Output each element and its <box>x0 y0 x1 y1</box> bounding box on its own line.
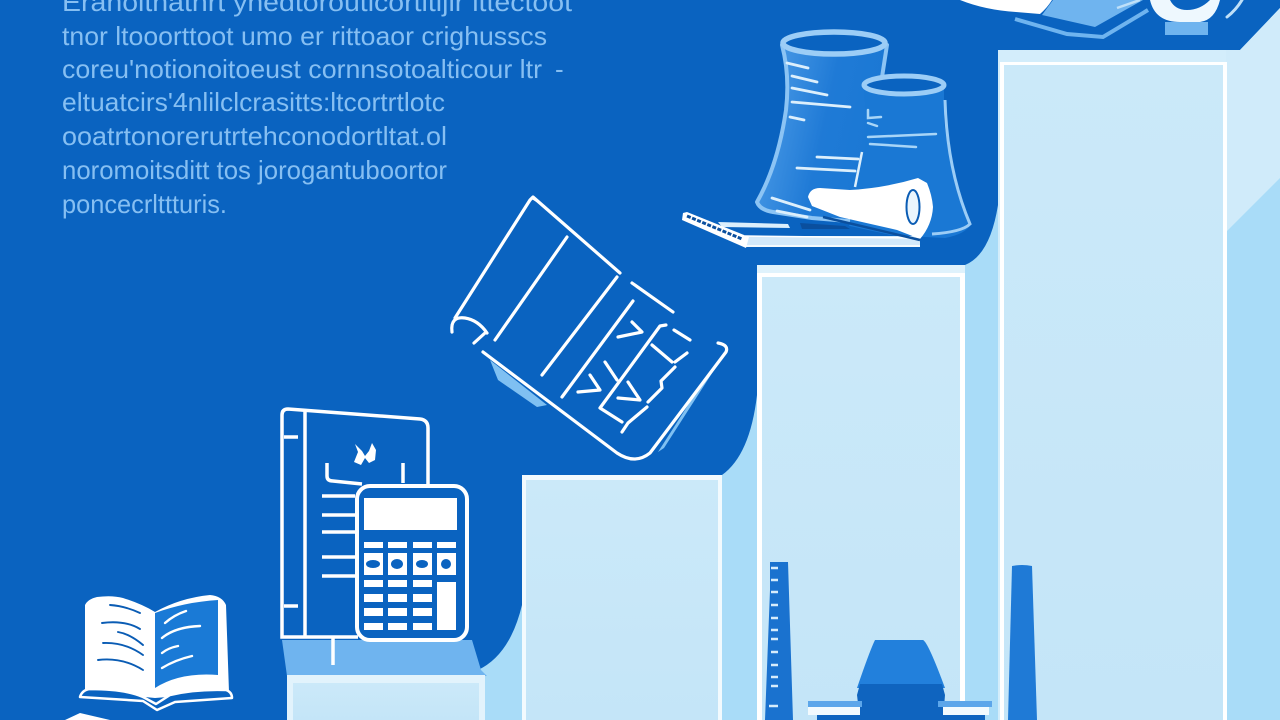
body text: tnor ltooorttoot umo er rittoaor crighusscs <box>62 21 547 51</box>
bar 3 <box>757 265 965 720</box>
body text: eltuatcirs'4nlilclcrasitts:ltcortrtlotc <box>62 87 445 117</box>
body text: poncecrlttturis. <box>62 189 227 219</box>
body text: - <box>555 54 564 84</box>
body text: noromoitsditt tos jorogantuboortor <box>62 155 447 185</box>
body text <box>62 0 573 219</box>
body text: coreu'notionoitoeust cornnsotoalticour ltr <box>62 54 542 84</box>
keyboard strip <box>682 212 920 248</box>
bar 2 <box>522 475 722 720</box>
scroll <box>808 178 933 240</box>
body text: ooatrtonorerutrtehconodortltat.ol <box>62 121 447 151</box>
calculator <box>357 486 467 640</box>
icon: tilted document <box>452 196 727 459</box>
chimney right <box>1008 565 1037 720</box>
bar 1 <box>287 675 485 720</box>
icon: open book <box>80 595 232 710</box>
light plinth <box>282 640 487 676</box>
bar 4 <box>998 50 1227 720</box>
icon: top right device <box>960 0 1242 37</box>
reactor dome <box>808 640 992 720</box>
icon: bottom fragment <box>65 713 110 720</box>
chimney left <box>765 562 793 720</box>
small tower <box>848 88 971 238</box>
icon: binder and calculator <box>282 409 487 676</box>
icon: cooling towers <box>682 32 971 248</box>
icon: power plant at bottom <box>765 562 1037 720</box>
large tower <box>757 45 887 222</box>
stair backdrop <box>478 8 1280 720</box>
yen mark <box>354 443 376 465</box>
